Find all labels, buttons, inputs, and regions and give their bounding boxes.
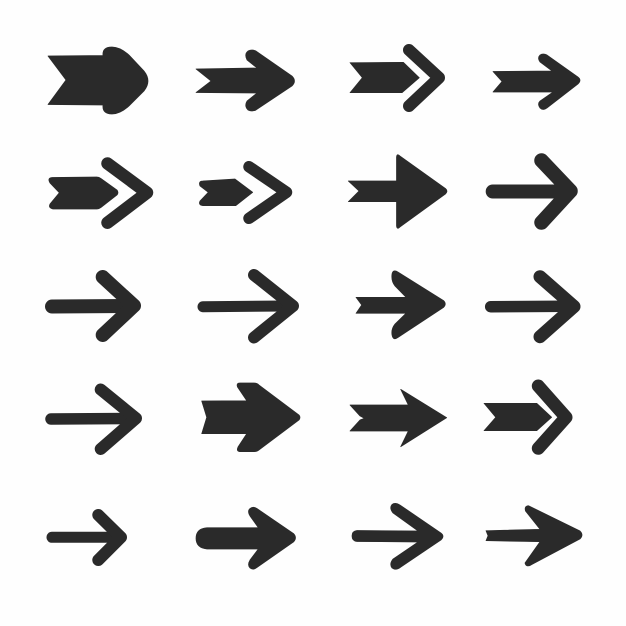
icon: wide rounded arrow with notched tail bbox=[48, 47, 148, 114]
icon: line arrow row three column one bbox=[52, 277, 134, 335]
icon: thick line arrow bbox=[493, 160, 570, 222]
icon: fat shaft arrow bbox=[196, 507, 296, 569]
icon: small line arrow bbox=[52, 515, 121, 560]
icon: notched arrow with rounded head bbox=[196, 50, 294, 111]
icon: tag arrow with chevron bbox=[350, 50, 439, 106]
icon: tag arrow with close chevron bbox=[484, 386, 566, 448]
icon: block arrow with wide head bbox=[202, 383, 300, 452]
icon: wide head arrow with small tail notch bbox=[486, 506, 582, 566]
icon: tapered line arrow bbox=[352, 503, 443, 569]
icon: small rounded tag arrow with chevron bbox=[199, 167, 286, 218]
icon: line arrow row three column four bbox=[491, 277, 574, 337]
icon: sharp barbed arrow bbox=[350, 389, 447, 447]
icon: slim notched arrow bbox=[493, 54, 580, 110]
icon: rounded tag arrow with chevron bbox=[49, 164, 147, 223]
icon: line arrow row four column one bbox=[51, 390, 136, 449]
icon: swept head arrow with notch bbox=[356, 271, 445, 339]
icon: thin pointed line arrow bbox=[203, 275, 293, 338]
icon: large triangle head arrow bbox=[348, 155, 447, 228]
